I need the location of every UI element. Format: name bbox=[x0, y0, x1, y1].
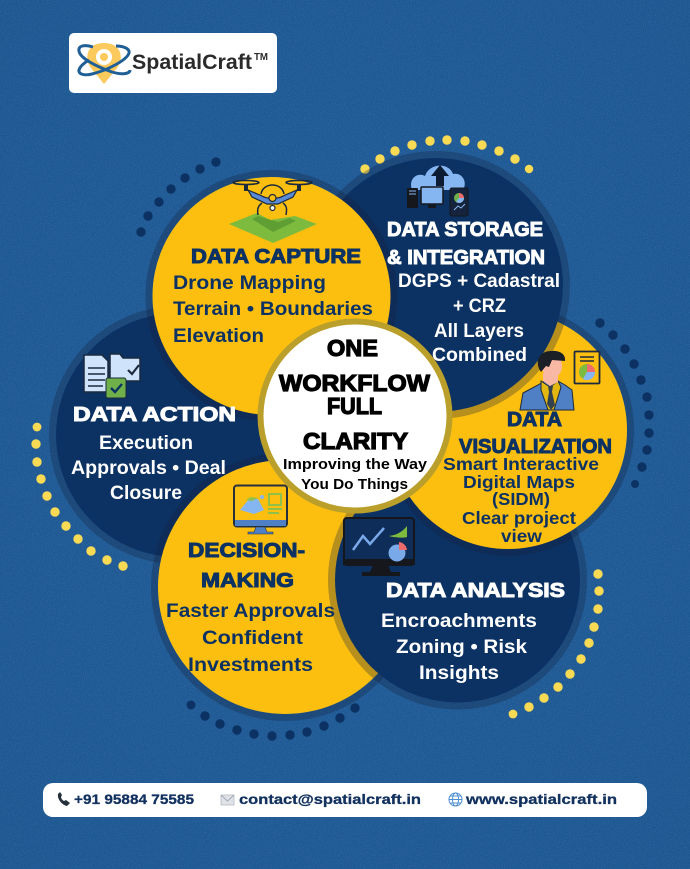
icon: location pin with orbit bbox=[79, 43, 130, 84]
icon: approved documents bbox=[84, 354, 140, 398]
text: data visualization details bbox=[443, 454, 599, 546]
panel: data visualization bbox=[386, 308, 630, 552]
yellow dots: left arc bbox=[31, 423, 128, 571]
icon: phone bbox=[58, 792, 70, 806]
text: data analysis details: Encroachments bbox=[381, 611, 537, 632]
heading: decision-making: MAKING bbox=[201, 570, 294, 592]
yellow dots: lower right arc bbox=[509, 569, 604, 718]
icon: decision monitor bbox=[234, 486, 287, 534]
icon: drone over field bbox=[229, 180, 317, 243]
text: data analysis details: Zoning • Risk bbox=[396, 637, 527, 658]
center tagline bbox=[283, 456, 428, 493]
email address: contact@spatialcraft.in bbox=[239, 791, 421, 807]
logo card bbox=[69, 33, 277, 93]
heading: data visualization: VISUALIZATION bbox=[459, 436, 612, 458]
text: data capture details: Elevation bbox=[173, 326, 264, 347]
panel: data action bbox=[52, 310, 304, 560]
text: data action details: Approvals • Deal bbox=[71, 458, 226, 479]
text: data action details: Execution bbox=[99, 433, 193, 454]
phone number: +91 95884 75585 bbox=[74, 791, 194, 807]
center headline: WORKFLOW bbox=[279, 370, 430, 396]
heading: decision-making: DECISION- bbox=[188, 540, 305, 562]
heading: data visualization: DATA bbox=[507, 409, 562, 431]
heading: data storage and integration: & INTEGRATION bbox=[387, 247, 545, 269]
text: data visualization details: Clear project bbox=[462, 508, 576, 528]
text: data storage details: All Layers bbox=[434, 321, 524, 342]
navy dots: right arc bbox=[595, 318, 654, 488]
heading: data capture: DATA CAPTURE bbox=[191, 246, 361, 268]
text: data action details: Closure bbox=[110, 483, 182, 504]
text: data visualization details: Digital Maps bbox=[463, 472, 575, 492]
text: data storage details: Combined bbox=[432, 345, 527, 366]
text: data capture details: Drone Mapping bbox=[173, 273, 326, 294]
text: decision-making details: Confident bbox=[202, 628, 304, 649]
text: data storage details: DGPS + Cadastral bbox=[398, 271, 560, 292]
icon: analytics monitor bbox=[343, 518, 415, 576]
text: data visualization details: view bbox=[501, 526, 542, 546]
icon: globe bbox=[449, 793, 462, 806]
text: data storage details: + CRZ bbox=[453, 296, 506, 317]
center headline: CLARITY bbox=[303, 428, 408, 454]
text: data capture details bbox=[173, 273, 373, 347]
heading: decision-making bbox=[188, 540, 305, 592]
navy dots: upper left arc bbox=[136, 157, 221, 237]
panel: decision-making bbox=[154, 456, 416, 718]
center circle bbox=[260, 322, 450, 510]
heading: data storage and integration bbox=[387, 219, 545, 269]
center tagline: You Do Things bbox=[301, 476, 408, 493]
icon: cloud storage with devices bbox=[407, 165, 468, 216]
text: data storage details bbox=[398, 271, 560, 366]
heading: data analysis: DATA ANALYSIS bbox=[386, 580, 565, 602]
heading: data visualization bbox=[459, 409, 612, 458]
text: decision-making details: Investments bbox=[188, 655, 313, 676]
trademark: TM bbox=[254, 52, 268, 63]
text: data capture details: Terrain • Boundaries bbox=[173, 299, 373, 320]
icon: envelope bbox=[221, 795, 234, 805]
brand name: SpatialCraft bbox=[132, 51, 252, 74]
heading: data action: DATA ACTION bbox=[73, 404, 236, 426]
text: decision-making details bbox=[166, 601, 335, 676]
panel: data storage bbox=[306, 154, 566, 416]
panel: data capture bbox=[149, 174, 394, 418]
contact bar bbox=[43, 783, 647, 817]
center headline bbox=[279, 335, 430, 454]
text: data analysis details bbox=[381, 611, 537, 684]
text: data action details bbox=[71, 433, 226, 504]
panel: data analysis bbox=[332, 454, 584, 706]
center headline: FULL bbox=[327, 393, 382, 419]
yellow dots: top arc bbox=[360, 135, 533, 174]
heading: data storage and integration: DATA STORAGE bbox=[387, 219, 543, 241]
icon: presenter with report bbox=[520, 351, 600, 410]
text: decision-making details: Faster Approvals bbox=[166, 601, 335, 622]
text: data visualization details: Smart Interactive bbox=[443, 454, 599, 474]
text: data analysis details: Insights bbox=[419, 663, 499, 684]
text: data visualization details: (SIDM) bbox=[492, 489, 550, 509]
website: www.spatialcraft.in bbox=[465, 791, 617, 807]
navy dots: bottom arc bbox=[187, 701, 360, 741]
center tagline: Improving the Way bbox=[283, 456, 428, 473]
center headline: ONE bbox=[327, 335, 378, 361]
